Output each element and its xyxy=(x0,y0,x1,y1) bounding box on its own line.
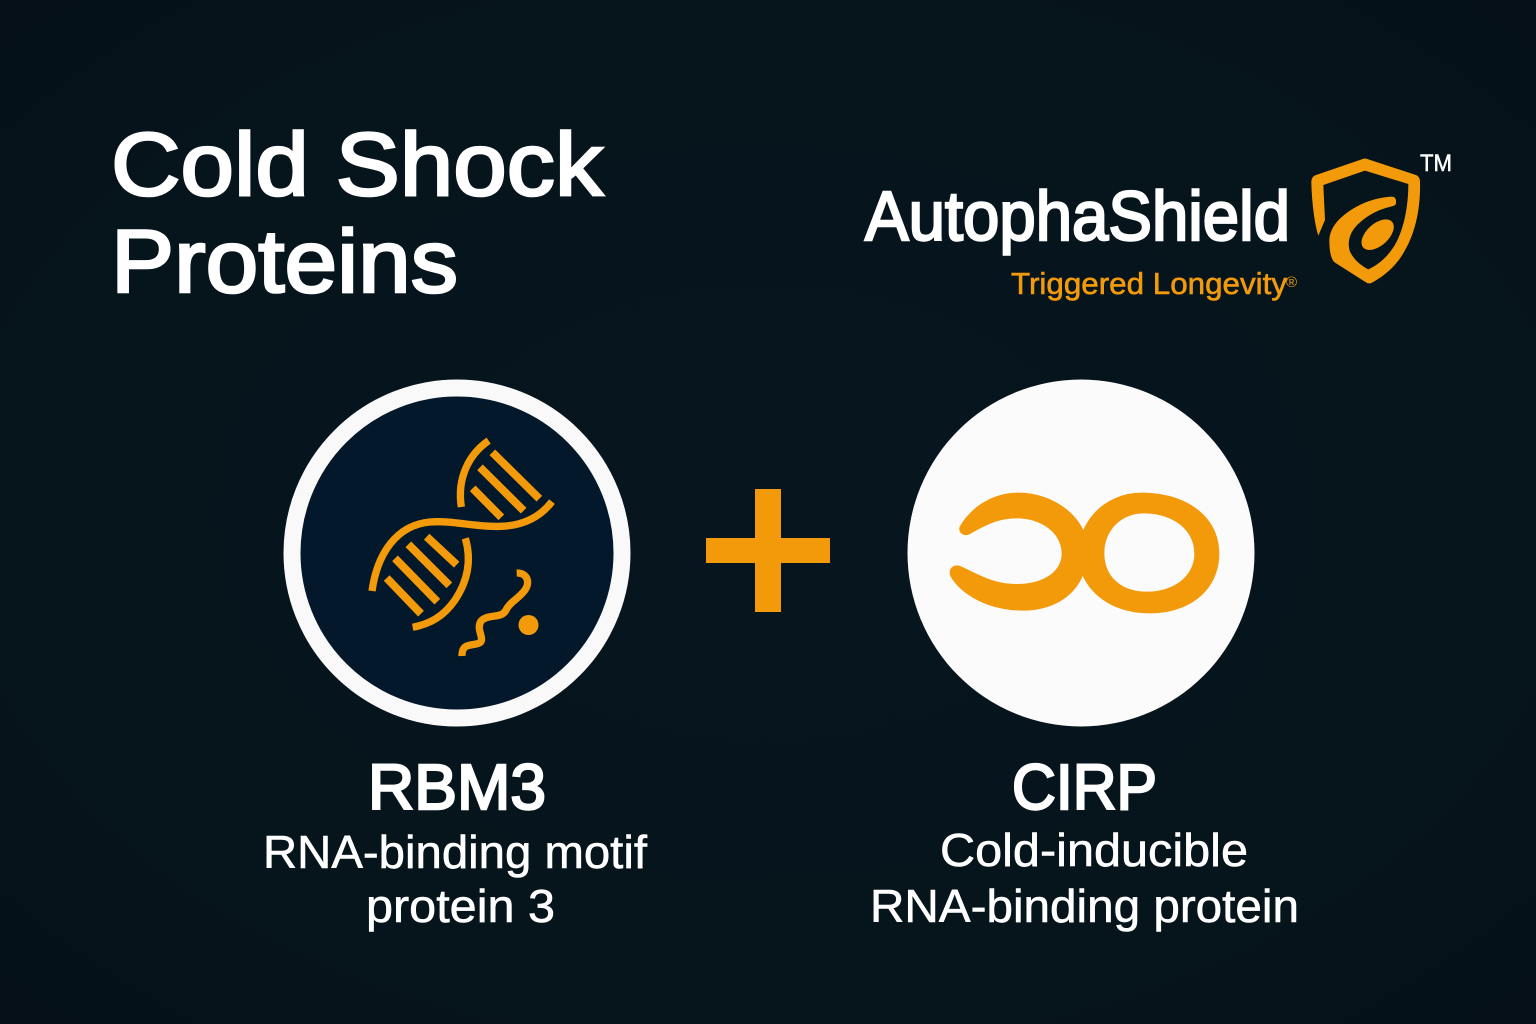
panel: CIRP xyxy=(870,380,1299,932)
heading: RBM3: RBM3 xyxy=(368,751,546,823)
icon: shield xyxy=(1311,158,1420,283)
description: CIRP: Cold-inducible xyxy=(940,824,1248,876)
tagline: Triggered Longevity xyxy=(1011,266,1288,301)
description: RBM3: protein 3 xyxy=(366,880,555,932)
title: Cold Shock xyxy=(111,114,604,214)
icon: DNA helix xyxy=(372,441,552,627)
icon: plus sign xyxy=(706,489,830,612)
icon circle: loop symbol xyxy=(908,380,1254,726)
panel: RBM3 xyxy=(263,388,647,932)
description: RBM3 xyxy=(263,826,647,932)
icon: dot xyxy=(518,615,538,635)
icon: open loop infinity xyxy=(950,493,1219,613)
registered mark: ® xyxy=(1286,274,1297,291)
brand name: AutophaShield xyxy=(865,177,1290,255)
trademark mark: TM xyxy=(1420,150,1452,177)
icon: RNA strand xyxy=(462,573,528,656)
icon circle: DNA and RNA strand xyxy=(292,388,622,718)
title xyxy=(111,114,604,311)
description: CIRP xyxy=(870,824,1299,932)
title: Proteins xyxy=(111,211,458,311)
heading: CIRP: CIRP xyxy=(1012,751,1157,823)
brand logo: AutophaShield xyxy=(865,150,1452,301)
description: RBM3: RNA-binding motif xyxy=(263,826,647,878)
description: CIRP: RNA-binding protein xyxy=(870,880,1299,932)
